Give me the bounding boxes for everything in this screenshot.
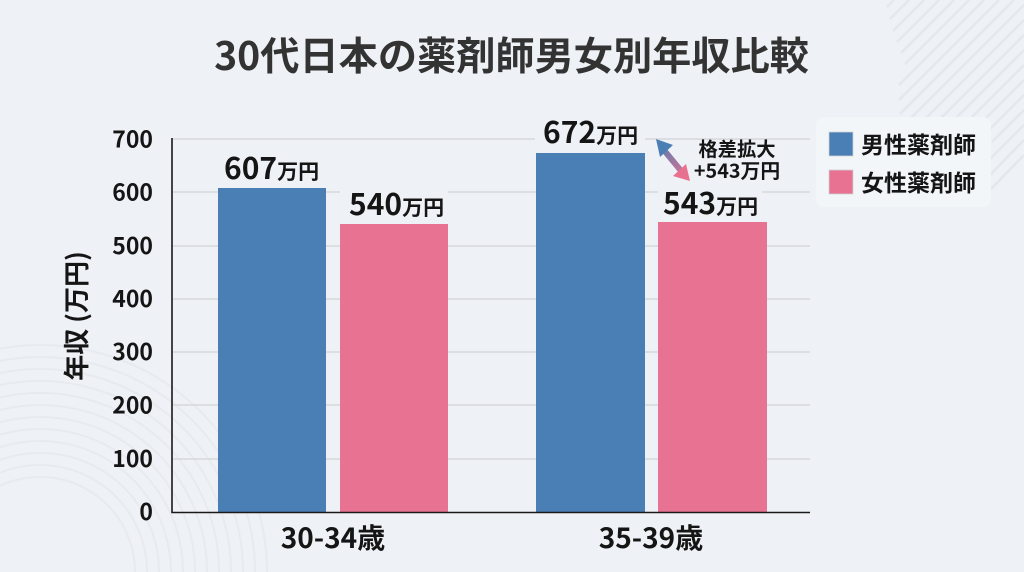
legend: [816, 117, 991, 207]
bar: male 35-39: [536, 153, 645, 512]
y axis labels: 0: [139, 493, 153, 527]
y axis labels: 500: [112, 227, 153, 261]
arrow: gap: [656, 139, 690, 181]
value label 607: 607万円: [224, 144, 319, 188]
y axis labels: 700: [112, 120, 153, 154]
legend: female: 女性薬剤師: [861, 164, 976, 198]
y axis labels: 200: [112, 386, 153, 420]
x axis label 35-39: 35-39歳: [599, 517, 703, 557]
y axis title: 年収 (万円): [57, 251, 94, 381]
bar: male 30-34: [218, 188, 326, 512]
y axis labels: 400: [112, 280, 153, 314]
legend: male: 男性薬剤師: [861, 126, 976, 160]
callout: gap: +543万円: [694, 155, 780, 184]
y axis labels: [112, 120, 153, 527]
callout: gap: 格差拡大: [698, 134, 776, 162]
y axis labels: 300: [112, 333, 153, 367]
value label 672: 672万円: [543, 108, 638, 152]
callout: gap: [694, 134, 780, 184]
bar: female 35-39: [658, 222, 767, 512]
y axis labels: 600: [112, 174, 153, 208]
axes: [172, 138, 810, 512]
bar: female 30-34: [340, 224, 448, 512]
title: 30代日本の薬剤師男女別年収比較: [214, 26, 809, 82]
value label 543: 543万円: [663, 179, 758, 223]
x axis label 30-34: 30-34歳: [281, 517, 385, 557]
value label 540: 540万円: [349, 180, 444, 224]
y axis labels: 100: [112, 440, 153, 474]
bar chart: [57, 108, 810, 557]
